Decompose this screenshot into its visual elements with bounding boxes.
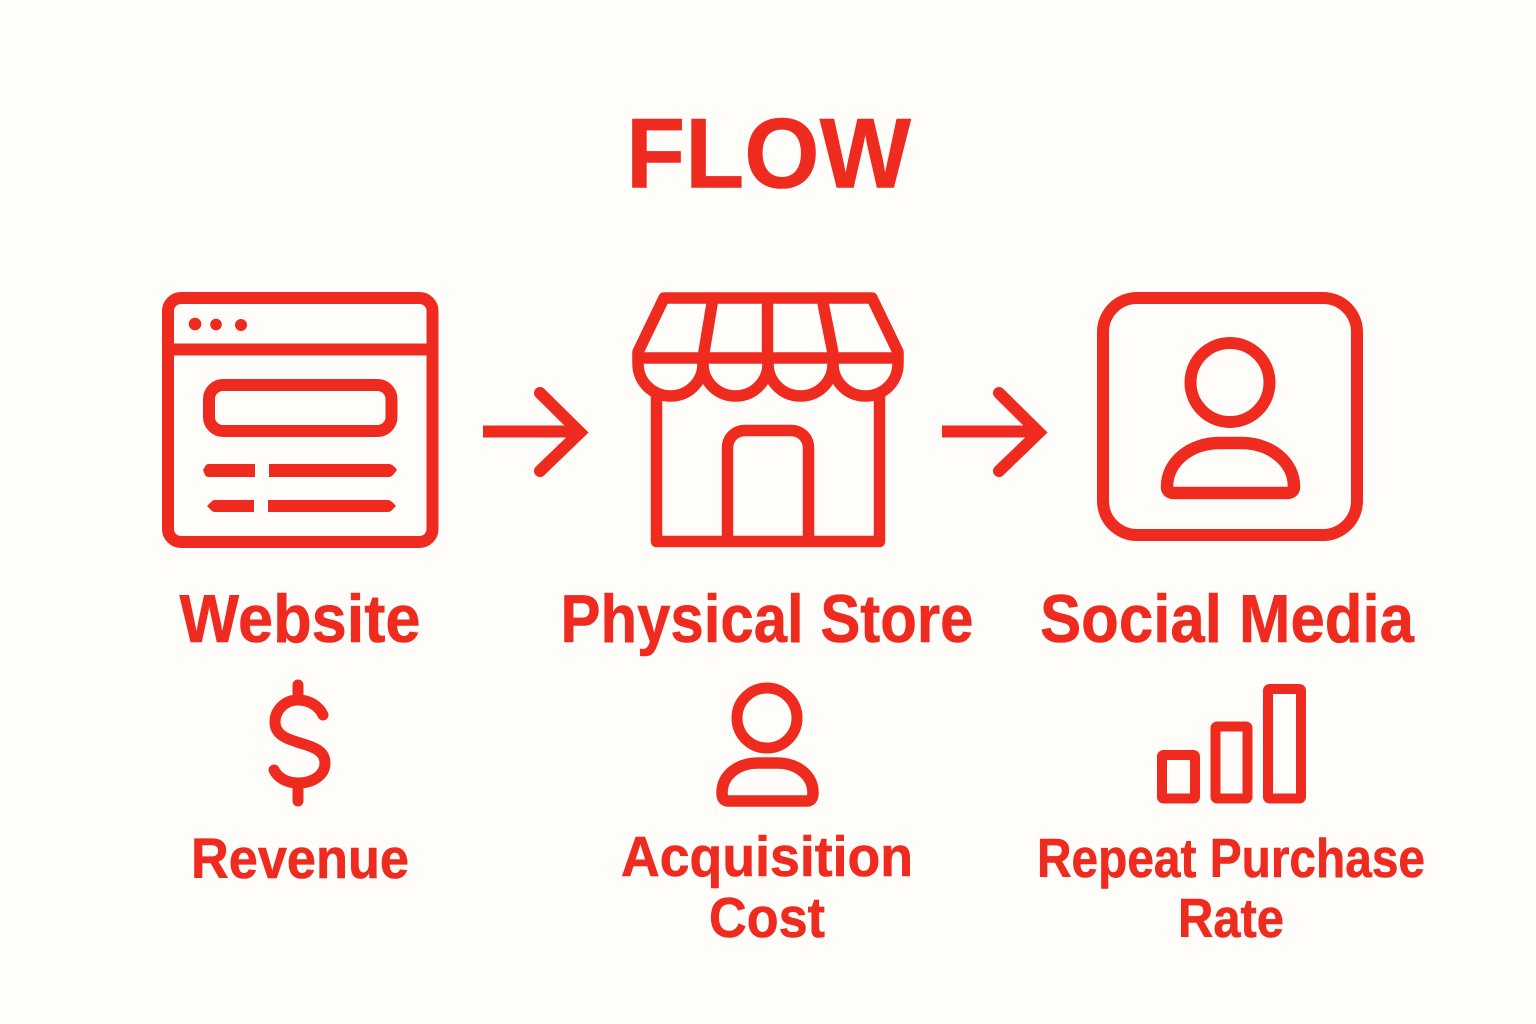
icon: social media profile — [1103, 298, 1357, 535]
label: revenue: Revenue — [191, 827, 409, 891]
arrow: website to store — [483, 393, 580, 471]
icon: website — [168, 298, 432, 542]
label: website: Website — [180, 581, 420, 657]
icon: bar chart — [1162, 689, 1301, 798]
label: acquisition cost: Cost — [709, 886, 825, 950]
label: repeat purchase rate: Rate — [1178, 887, 1284, 949]
label: acquisition cost — [621, 825, 913, 950]
icon: customer — [722, 688, 813, 801]
label: social media: Social Media — [1040, 581, 1415, 657]
label: repeat purchase rate — [1037, 827, 1425, 949]
icon: dollar — [274, 685, 325, 801]
title: FLOW — [626, 98, 912, 208]
arrow: store to social media — [942, 393, 1039, 471]
icon: physical store — [638, 298, 898, 542]
label: acquisition cost: Acquisition — [621, 825, 913, 889]
label: repeat purchase rate: Repeat Purchase — [1037, 827, 1425, 889]
label: physical store: Physical Store — [560, 581, 974, 657]
